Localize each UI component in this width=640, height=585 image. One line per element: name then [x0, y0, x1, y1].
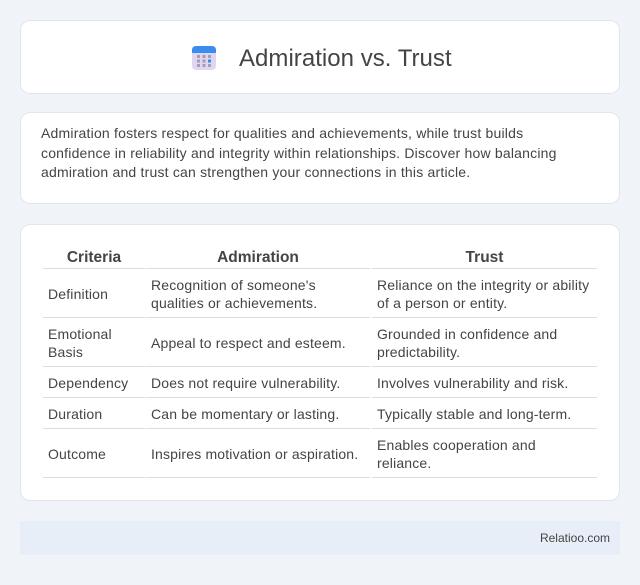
- header card: [20, 20, 620, 94]
- row: Duration: Typically stable and long-term.: [377, 406, 571, 422]
- footer bar: [20, 521, 620, 555]
- table header: Criteria: Criteria: [67, 249, 121, 266]
- row: Definition: [48, 277, 590, 311]
- row: Outcome: Enables cooperation and: [377, 437, 536, 453]
- row: Dependency: Does not require vulnerability.: [151, 375, 340, 391]
- intro text: confidence in reliability and integrity within relationships. Discover how balancing: [41, 144, 557, 160]
- comparison table card: [20, 224, 620, 501]
- intro text: [41, 125, 557, 180]
- intro card: [20, 112, 620, 204]
- row: Definition: of a person or entity.: [377, 295, 507, 311]
- row: Definition: Recognition of someone's: [151, 277, 316, 293]
- row: Definition: Definition: [48, 286, 108, 302]
- row: Emotional Basis: Grounded in confidence and: [377, 326, 557, 342]
- row: Definition: qualities or achievements.: [151, 295, 317, 311]
- row: Dependency: Dependency: [48, 375, 128, 391]
- icon: calendar: [192, 46, 216, 70]
- row: Duration: Can be momentary or lasting.: [151, 406, 339, 422]
- row: Definition: Reliance on the integrity or ability: [377, 277, 589, 293]
- intro text: Admiration fosters respect for qualities and achievements, while trust builds: [41, 125, 523, 141]
- row: Duration: [48, 406, 571, 422]
- row: Emotional Basis: Appeal to respect and esteem.: [151, 335, 346, 351]
- intro text: admiration and trust can strengthen your connections in this article.: [41, 164, 470, 180]
- title: Admiration vs. Trust: [239, 45, 452, 72]
- row: Emotional Basis: [48, 326, 557, 360]
- row: Outcome: [48, 437, 536, 471]
- row: Emotional Basis: Basis: [48, 344, 83, 360]
- row: Outcome: Inspires motivation or aspiration.: [151, 446, 358, 462]
- row: Emotional Basis: Emotional: [48, 326, 112, 342]
- row: Dependency: [48, 375, 568, 391]
- table header: Trust: Trust: [466, 249, 503, 266]
- row: Dependency: Involves vulnerability and risk.: [377, 375, 568, 391]
- row: Emotional Basis: predictability.: [377, 344, 460, 360]
- row: Outcome: Outcome: [48, 446, 106, 462]
- row: Outcome: reliance.: [377, 455, 431, 471]
- footer text: Relatioo.com: [540, 531, 610, 545]
- table header: Admiration: Admiration: [217, 249, 299, 266]
- row: Duration: Duration: [48, 406, 102, 422]
